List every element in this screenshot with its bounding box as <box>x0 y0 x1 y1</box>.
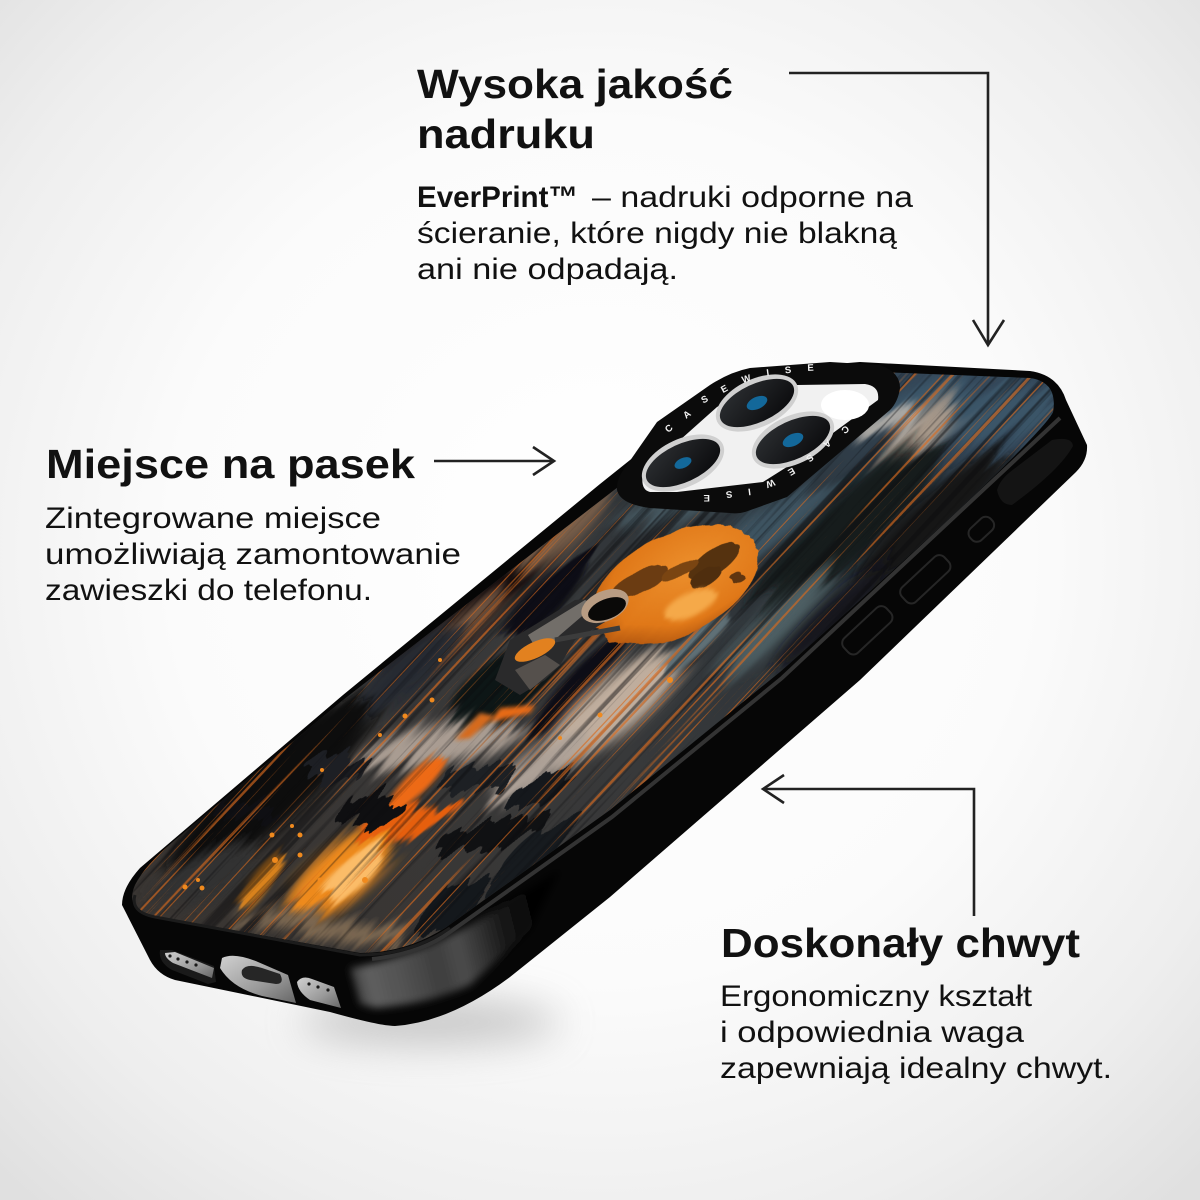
body text <box>417 181 913 286</box>
body text: EverPrint™ <box>417 181 578 214</box>
camera island: CASEWISE <box>665 364 814 432</box>
heading: Wysoka jakość <box>417 61 733 107</box>
side rim highlight <box>372 418 1060 959</box>
lens right <box>743 400 843 480</box>
side buttons <box>839 439 1073 657</box>
artwork: dark clusters <box>414 759 582 938</box>
streak texture: orange <box>593 643 607 657</box>
case body <box>122 362 1087 1026</box>
heading <box>417 61 733 157</box>
lower corner reflection <box>348 906 516 1012</box>
camera island <box>617 362 900 514</box>
body text: Ergonomiczny kształt <box>720 980 1033 1013</box>
heading: Miejsce na pasek <box>46 441 415 487</box>
moon <box>595 524 759 644</box>
artwork: sky and clouds <box>612 374 1054 688</box>
lens left <box>633 423 733 503</box>
arrow: to grip side <box>763 775 974 916</box>
artwork: dark band, trees, smoke <box>348 488 736 817</box>
camera island: CASEWISE <box>704 426 849 502</box>
body text: zawieszki do telefonu. <box>45 574 372 607</box>
callout: grip <box>720 920 1112 1085</box>
heading: nadruku <box>417 111 595 157</box>
bottom ports <box>160 950 341 1008</box>
body text: ani nie odpadają. <box>417 253 678 286</box>
speaker left <box>160 950 216 984</box>
glass edge <box>134 895 450 955</box>
heading: Doskonały chwyt <box>721 920 1080 966</box>
astronaut <box>455 582 634 740</box>
camera glass window <box>642 384 878 492</box>
arrow: to print surface <box>789 73 1004 345</box>
body text: i odpowiednia waga <box>720 1016 1024 1049</box>
callout: strap slot <box>45 441 461 607</box>
arrow: to strap slot <box>434 447 554 475</box>
body text <box>720 980 1112 1085</box>
phone in case <box>122 362 1088 1026</box>
embers <box>182 658 673 890</box>
body text: ścieranie, które nigdy nie blakną <box>417 217 897 250</box>
usb-c port <box>220 956 296 1003</box>
callout: print quality <box>417 61 913 286</box>
body text <box>45 502 461 607</box>
body text: zapewniają idealny chwyt. <box>720 1052 1112 1085</box>
body text: umożliwiają zamontowanie <box>45 538 461 571</box>
artwork: lower left glow <box>158 686 466 952</box>
body text: – nadruki odporne na <box>592 181 913 214</box>
lens top <box>707 363 807 443</box>
speaker right <box>297 978 341 1008</box>
body text: Zintegrowane miejsce <box>45 502 381 535</box>
phone shadow <box>300 1000 560 1044</box>
streak texture: dark <box>593 643 607 657</box>
artwork screen <box>132 372 1054 953</box>
casewise lettering <box>668 370 835 433</box>
